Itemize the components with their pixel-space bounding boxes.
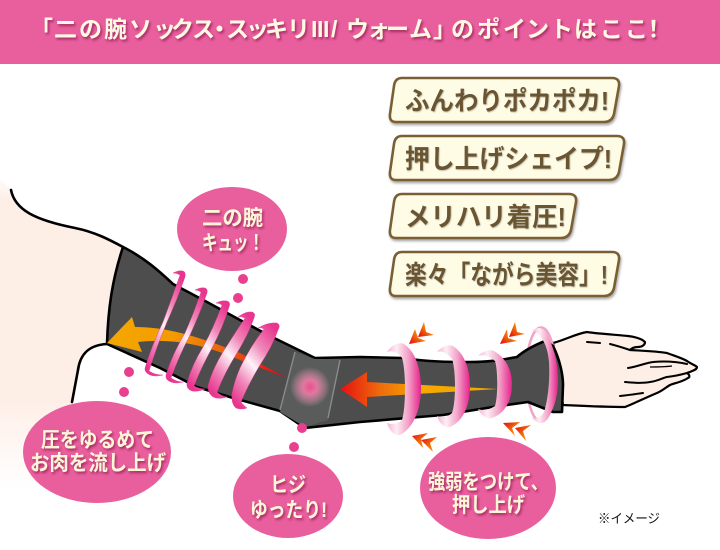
callout: forearm: 強弱をつけて、: [428, 471, 548, 494]
feature tag: fluffy warm: ふんわりポカポカ!: [405, 86, 609, 116]
callout dots: shoulder side: [119, 367, 134, 397]
callout: forearm: 押し上げ: [452, 494, 525, 517]
feature tag: firm compression: [390, 194, 576, 238]
callout: shoulder side: 圧をゆるめて: [41, 429, 154, 452]
wrist ring: back edge: [526, 328, 556, 422]
callout: shoulder side: [23, 401, 171, 503]
arm sleeve: [107, 247, 563, 428]
note: image only: ※イメージ: [598, 511, 660, 526]
feature tag: easy beauty care: 楽々「ながら美容」!: [405, 260, 608, 290]
compression rings: forearm: [387, 328, 558, 435]
callout: elbow: ヒジ: [270, 474, 306, 497]
feature tag: fluffy warm: [390, 78, 619, 122]
callout: elbow: [233, 454, 343, 538]
feature tag: lift and shape: 押し上げシェイプ!: [405, 144, 612, 174]
callout: forearm: [420, 437, 556, 539]
feature tag: firm compression: メリハリ着圧!: [405, 202, 566, 232]
callout: upper arm: 二の腕: [202, 207, 263, 230]
elbow panel: [280, 352, 340, 427]
pressure chevrons: top: [409, 322, 525, 344]
orange arrow: forearm: [340, 372, 498, 407]
callout: upper arm: キュッ！: [202, 232, 264, 255]
callout dots: upper arm: [233, 274, 248, 303]
orange arrow: upper arm: [107, 317, 287, 378]
compression rings: upper arm: [145, 271, 279, 409]
callout: elbow: ゆったり!: [250, 499, 327, 522]
callout: shoulder side: お肉を流し上げ: [30, 452, 166, 475]
title banner: [0, 0, 720, 64]
feature tag: lift and shape: [390, 136, 624, 180]
pressure chevrons: bottom: [412, 422, 531, 452]
callout dots: elbow: [289, 423, 307, 452]
upper body and shoulder: [0, 178, 123, 490]
hand: [553, 332, 697, 407]
title banner: 「二の腕ソックス・スッキリIII/ウォーム」のポイントはここ！: [30, 16, 665, 42]
feature tag: easy beauty care: [390, 252, 619, 296]
callout: upper arm: [177, 187, 287, 271]
